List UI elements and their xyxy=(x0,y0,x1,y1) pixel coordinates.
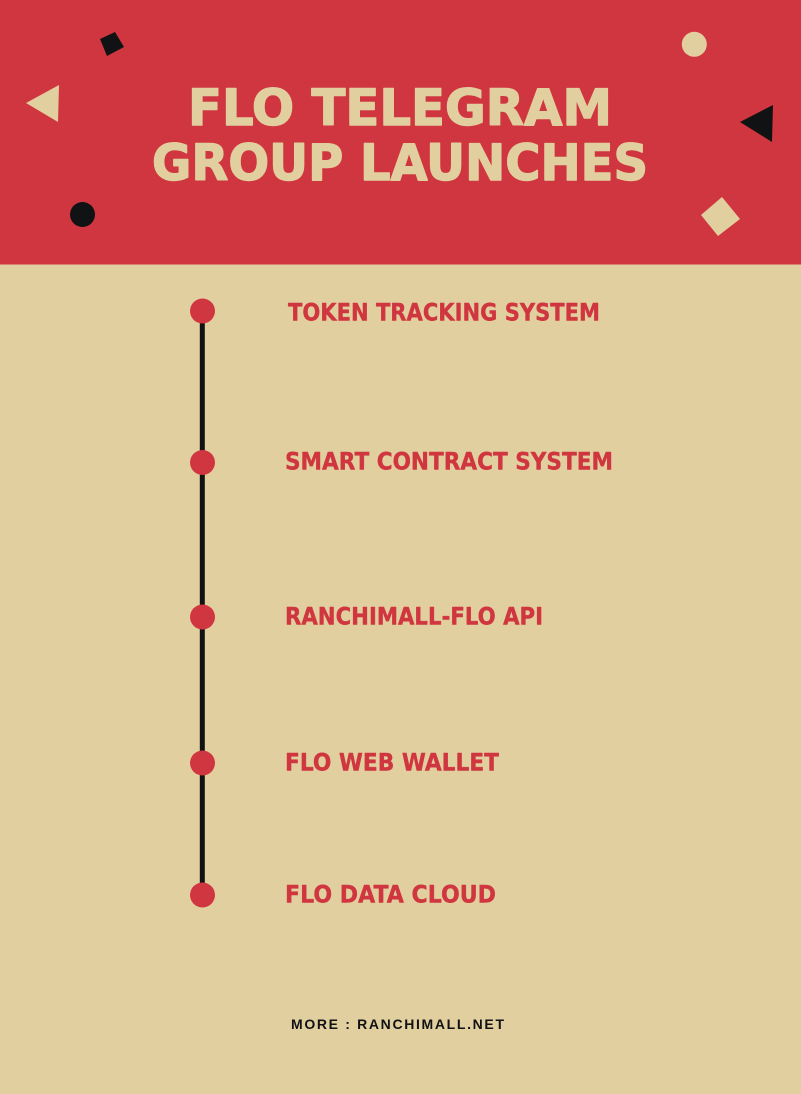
timeline labels xyxy=(285,298,613,908)
timeline marker 4 xyxy=(190,750,215,776)
icon: black triangle xyxy=(740,105,773,142)
label: smart contract system: SMART CONTRACT SYSTEM xyxy=(285,448,613,476)
title: GROUP LAUNCHES xyxy=(152,134,648,192)
timeline marker 2 xyxy=(190,450,215,475)
icon: cream triangle xyxy=(26,85,59,122)
label: flo web wallet: FLO WEB WALLET xyxy=(285,748,500,776)
timeline marker 3 xyxy=(190,604,215,630)
icon: black circle xyxy=(70,202,95,227)
timeline marker 1 xyxy=(190,298,215,324)
timeline xyxy=(190,298,215,908)
label: token tracking system: TOKEN TRACKING SYSTEM xyxy=(288,298,600,326)
title xyxy=(152,79,648,192)
timeline line xyxy=(200,311,205,895)
header background xyxy=(0,0,801,264)
icon: cream circle xyxy=(682,32,707,57)
footer link text: MORE : RANCHIMALL.NET xyxy=(291,1016,504,1032)
header banner xyxy=(0,0,801,264)
icon: cream diamond xyxy=(701,197,740,236)
title: FLO TELEGRAM xyxy=(188,79,612,137)
label: flo data cloud: FLO DATA CLOUD xyxy=(285,880,496,908)
timeline marker 5 xyxy=(190,882,215,908)
icon: black square xyxy=(100,32,124,56)
label: ranchimall-flo api: RANCHIMALL-FLO API xyxy=(285,602,543,630)
